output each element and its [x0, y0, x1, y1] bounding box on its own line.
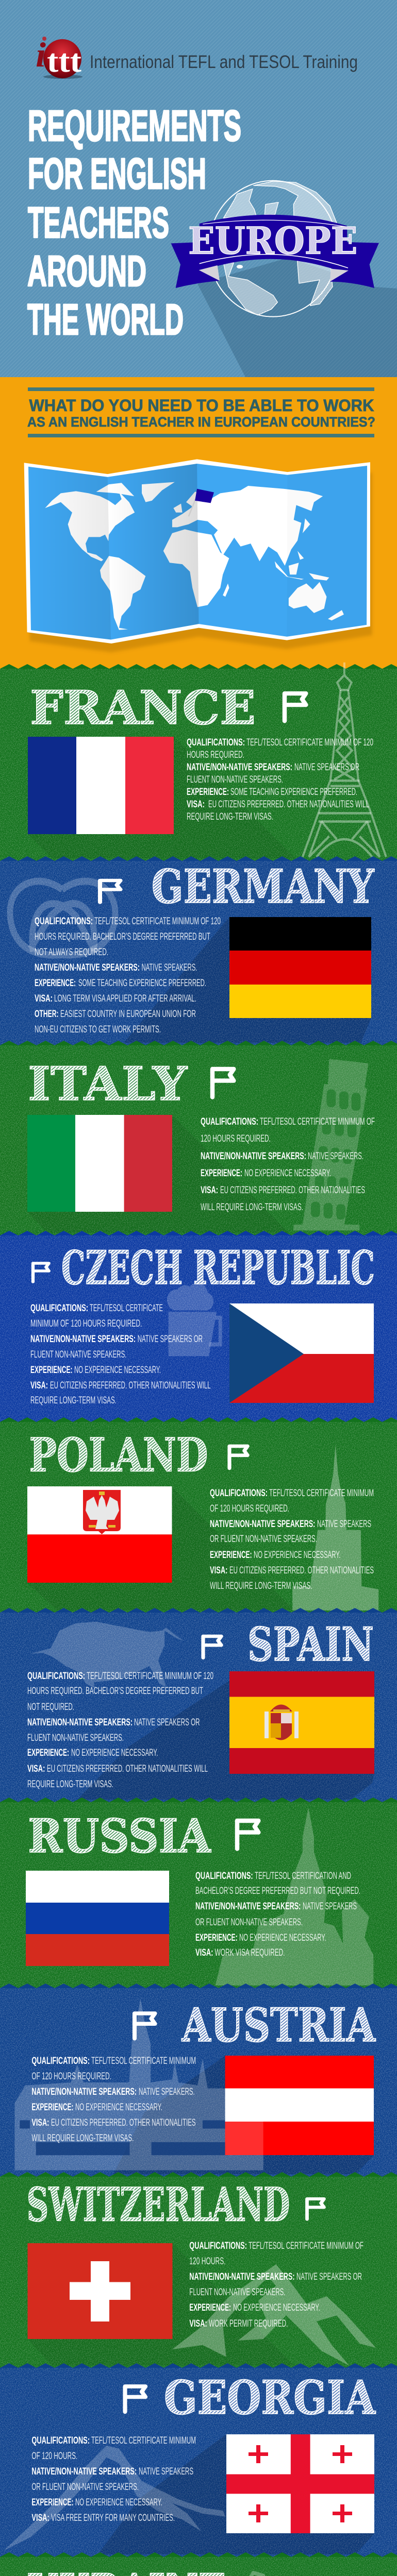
- flag shadow: [28, 737, 295, 858]
- text: Czech Republic requirements: REQUIRE LONG-TERM VISAS.: [30, 1395, 117, 1406]
- panel: France: [0, 663, 397, 865]
- flag shadow: [124, 917, 371, 1043]
- flag shadow: [113, 2056, 374, 2174]
- text: Czech Republic requirements: [30, 1302, 211, 1406]
- emblem: Polish eagle: [83, 1490, 121, 1534]
- text: Austria requirements: NATIVE SPEAKERS.: [139, 2086, 195, 2097]
- text: Russia requirements: VISA:: [195, 1947, 213, 1958]
- icon: flag marker: [203, 1636, 221, 1658]
- text: Switzerland requirements: FLUENT NON-NATIVE SPEAKERS.: [189, 2286, 286, 2298]
- text: Czech Republic requirements: FLUENT NON-NATIVE SPEAKERS.: [30, 1349, 127, 1360]
- text: Austria requirements: TEFL/TESOL CERTIFICATE MINIMUM: [91, 2055, 196, 2066]
- ribbon text: EUROPE: [188, 219, 357, 262]
- text: Georgia requirements: NO EXPERIENCE NECESSARY.: [75, 2497, 162, 2508]
- text: Czech Republic requirements: MINIMUM OF 120 HOURS REQUIRED.: [30, 1318, 142, 1329]
- flag: Russia: [26, 1871, 169, 1966]
- logo: ittt: ttt: [47, 44, 81, 79]
- text: France requirements: FLUENT NON-NATIVE SPEAKERS.: [187, 774, 283, 785]
- text: Poland requirements: WILL REQUIRE LONG-TERM VISAS.: [210, 1580, 312, 1591]
- text: Switzerland requirements: NO EXPERIENCE NECESSARY.: [233, 2302, 320, 2313]
- flag: Austria: [225, 2056, 374, 2155]
- text: Czech Republic requirements: EU CITIZENS PREFERRED. OTHER NATIONALITIES WILL: [50, 1380, 211, 1391]
- heading rule bottom: [28, 434, 374, 437]
- text: Italy requirements: NATIVE/NON-NATIVE SPEAKERS:: [201, 1150, 306, 1162]
- flag shadow: [98, 2434, 374, 2554]
- text: Poland requirements: QUALIFICATIONS:: [210, 1487, 268, 1499]
- icon: flag marker: [212, 1069, 234, 1097]
- text: Georgia requirements: NATIVE/NON-NATIVE SPEAKERS:: [31, 2466, 137, 2477]
- text: Germany requirements: NATIVE SPEAKERS.: [141, 962, 197, 973]
- icon: pin flag: [189, 489, 214, 516]
- panel: header: [0, 0, 397, 377]
- logo wordmark: International TEFL and TESOL Training: [90, 52, 358, 72]
- panel: Czech Republic: [0, 1231, 397, 1422]
- text: Switzerland requirements: [189, 2240, 363, 2329]
- text: Spain requirements: EXPERIENCE:: [27, 1747, 69, 1758]
- heading: Poland: POLAND: [29, 1428, 208, 1483]
- text: France requirements: VISA:: [187, 799, 205, 810]
- panel: Germany: [0, 856, 397, 1049]
- text: Russia requirements: NATIVE SPEAKERS: [303, 1901, 357, 1912]
- text: Austria requirements: NO EXPERIENCE NECESSARY.: [75, 2102, 162, 2113]
- text: France requirements: [187, 737, 373, 822]
- text: Germany requirements: VISA:: [35, 993, 53, 1004]
- text: France requirements: NATIVE/NON-NATIVE SPEAKERS:: [187, 761, 292, 773]
- text: Switzerland requirements: 120 HOURS.: [189, 2256, 226, 2267]
- text: Georgia requirements: OF 120 HOURS.: [31, 2450, 77, 2462]
- text: Georgia requirements: [31, 2435, 196, 2523]
- text: Spain requirements: EU CITIZENS PREFERRED. OTHER NATIONALITIES WILL: [47, 1763, 208, 1774]
- panel: Austria: [0, 1984, 397, 2179]
- text: Germany requirements: [35, 916, 221, 1035]
- text: Spain requirements: VISA:: [27, 1763, 45, 1774]
- flag: Germany: [229, 917, 371, 1018]
- panel: Spain: [0, 1608, 397, 1803]
- text: Russia requirements: NO EXPERIENCE NECESSARY.: [239, 1932, 326, 1943]
- text: Russia requirements: EXPERIENCE:: [195, 1932, 238, 1943]
- text: Spain requirements: [27, 1670, 213, 1790]
- text: Spain requirements: NO EXPERIENCE NECESSARY.: [71, 1747, 158, 1758]
- question heading: WHAT DO YOU NEED TO BE ABLE TO WORK: [29, 396, 374, 415]
- text: Germany requirements: TEFL/TESOL CERTIFICATE MINIMUM OF 120: [94, 916, 221, 927]
- logo: ittt: [36, 35, 82, 79]
- icon: mountains: [172, 2264, 376, 2366]
- question heading: AS AN ENGLISH TEACHER IN EUROPEAN COUNTRIES?: [27, 414, 375, 430]
- text: Georgia requirements: QUALIFICATIONS:: [31, 2435, 90, 2446]
- text: Czech Republic requirements: VISA:: [30, 1380, 48, 1391]
- main title: THE WORLD: [27, 295, 184, 344]
- icon: flag marker: [100, 880, 121, 902]
- text: Italy requirements: VISA:: [201, 1184, 218, 1196]
- heading: Italy: ITALY: [28, 1057, 188, 1111]
- text: France requirements: HOURS REQUIRED.: [187, 749, 244, 760]
- icon: palace of culture: [292, 1444, 378, 1611]
- text: Italy requirements: EXPERIENCE:: [201, 1167, 242, 1179]
- icon: flag marker: [237, 1821, 258, 1849]
- text: Germany requirements: EASIEST COUNTRY IN EUROPEAN UNION FOR: [60, 1008, 196, 1020]
- panel: Poland: [0, 1417, 397, 1613]
- text: Italy requirements: WILL REQUIRE LONG-TERM VISAS.: [201, 1201, 303, 1213]
- text: Switzerland requirements: QUALIFICATIONS:: [189, 2240, 247, 2251]
- panel: Georgia: [0, 2363, 397, 2558]
- text: Poland requirements: OR FLUENT NON-NATIVE SPEAKERS.: [210, 1533, 317, 1545]
- text: Austria requirements: NATIVE/NON-NATIVE SPEAKERS:: [31, 2086, 137, 2097]
- flag: Czech Republic: [229, 1303, 374, 1403]
- text: Spain requirements: QUALIFICATIONS:: [27, 1670, 85, 1682]
- text: Germany requirements: HOURS REQUIRED. BACHELOR’S DEGREE PREFERRED BUT: [35, 931, 210, 942]
- text: Italy requirements: NO EXPERIENCE NECESSARY.: [244, 1167, 331, 1179]
- text: Russia requirements: [195, 1870, 360, 1958]
- icon: leaning tower of Pisa: [293, 1059, 369, 1230]
- icon: Eiffel tower: [303, 663, 386, 857]
- icon: flag marker: [285, 693, 306, 721]
- main title: TEACHERS: [28, 198, 169, 247]
- text: Georgia requirements: EXPERIENCE:: [31, 2497, 73, 2508]
- flag: Georgia: [226, 2434, 374, 2533]
- text: Spain requirements: NOT REQUIRED.: [27, 1701, 74, 1713]
- text: Czech Republic requirements: EXPERIENCE:: [30, 1364, 72, 1376]
- flag: Italy: [27, 1115, 172, 1212]
- text: Germany requirements: OTHER:: [35, 1008, 59, 1020]
- icon: flag marker: [33, 1263, 49, 1282]
- text: Germany requirements: NON-EU CITIZENS TO GET WORK PERMITS.: [35, 1024, 161, 1035]
- text: Spain requirements: NATIVE/NON-NATIVE SPEAKERS:: [27, 1717, 133, 1728]
- main title: FOR ENGLISH: [28, 149, 206, 198]
- text: France requirements: QUALIFICATIONS:: [187, 737, 245, 748]
- main title: REQUIREMENTS: [28, 101, 241, 150]
- text: Poland requirements: [210, 1487, 374, 1591]
- text: Russia requirements: WORK VISA REQUIRED.: [214, 1947, 285, 1958]
- text: Georgia requirements: VISA:: [31, 2512, 49, 2523]
- panel: question and world map: [0, 377, 397, 669]
- world map: [24, 459, 372, 652]
- icon: beer mug: [167, 1282, 220, 1356]
- text: Russia requirements: OR FLUENT NON-NATIVE SPEAKERS.: [195, 1917, 303, 1928]
- heading: Russia: RUSSIA: [28, 1809, 211, 1863]
- icon: Vienna parliament: [14, 1998, 263, 2170]
- heading: France: FRANCE: [30, 681, 256, 735]
- icon: Carpathian mountains: [139, 2573, 387, 2576]
- icon: flag marker: [135, 2013, 155, 2039]
- building overlap on flag: [225, 2093, 263, 2155]
- text: Poland requirements: VISA:: [210, 1565, 228, 1576]
- icon: mountains: [4, 2446, 225, 2551]
- text: Italy requirements: QUALIFICATIONS:: [201, 1116, 258, 1127]
- text: Czech Republic requirements: TEFL/TESOL CERTIFICATE: [90, 1302, 163, 1314]
- flag shadow: [27, 1486, 294, 1610]
- text: Spain requirements: REQUIRE LONG-TERM VISAS.: [27, 1778, 113, 1790]
- icon: pretzel: [10, 882, 115, 955]
- text: Switzerland requirements: NATIVE/NON-NATIVE SPEAKERS:: [189, 2271, 295, 2282]
- question heading: [27, 396, 375, 430]
- text: Czech Republic requirements: NATIVE/NON-NATIVE SPEAKERS:: [30, 1333, 136, 1345]
- text: Austria requirements: VISA:: [31, 2117, 49, 2128]
- panel: Ukraine: [0, 2552, 397, 2576]
- text: Italy requirements: [201, 1116, 375, 1213]
- text: Switzerland requirements: VISA:: [189, 2318, 207, 2329]
- panel: Russia: [0, 1798, 397, 1993]
- flag shadow: [28, 2243, 294, 2365]
- flag shadow: [27, 1115, 289, 1233]
- text: Austria requirements: [31, 2055, 196, 2144]
- text: Germany requirements: SOME TEACHING EXPERIENCE PREFERRED.: [78, 977, 206, 989]
- emblem: Spanish coat of arms: [264, 1704, 299, 1740]
- panel: Switzerland: [0, 2172, 397, 2370]
- icon: globe with Europe ribbon: [171, 181, 379, 317]
- text: Spain requirements: TEFL/TESOL CERTIFICATE MINIMUM OF 120: [87, 1670, 213, 1682]
- heading rule top: [28, 387, 374, 391]
- text: Germany requirements: NATIVE/NON-NATIVE SPEAKERS:: [35, 962, 140, 973]
- text: Germany requirements: QUALIFICATIONS:: [35, 916, 93, 927]
- text: Georgia requirements: TEFL/TESOL CERTIFICATE MINIMUM: [91, 2435, 196, 2446]
- icon: flag marker: [125, 2386, 145, 2412]
- text: Spain requirements: FLUENT NON-NATIVE SPEAKERS.: [27, 1732, 124, 1743]
- text: Austria requirements: OF 120 HOURS REQUIRED.: [31, 2071, 111, 2082]
- text: Italy requirements: 120 HOURS REQUIRED.: [201, 1133, 271, 1144]
- text: Switzerland requirements: WORK PERMIT REQUIRED.: [209, 2318, 288, 2329]
- ribbon: [171, 215, 379, 288]
- text: Spain requirements: HOURS REQUIRED. BACHELOR’S DEGREE PREFERRED BUT: [27, 1685, 203, 1697]
- icon: bull: [30, 1622, 185, 1688]
- text: Germany requirements: EXPERIENCE:: [35, 977, 76, 989]
- panel: Italy: [0, 1041, 397, 1235]
- text: Spain requirements: NATIVE SPEAKERS OR: [134, 1717, 200, 1728]
- flag: Switzerland: [28, 2243, 172, 2339]
- text: Poland requirements: EXPERIENCE:: [210, 1549, 252, 1561]
- text: Austria requirements: QUALIFICATIONS:: [31, 2055, 90, 2066]
- logo: ittt: i: [36, 35, 46, 74]
- main title: AROUND: [27, 247, 146, 295]
- text: Russia requirements: NATIVE/NON-NATIVE SPEAKERS:: [195, 1901, 301, 1912]
- text: Switzerland requirements: EXPERIENCE:: [189, 2302, 231, 2313]
- text: Austria requirements: EU CITIZENS PREFERRED. OTHER NATIONALITIES: [51, 2117, 196, 2128]
- text: France requirements: EXPERIENCE:: [187, 786, 229, 798]
- text: Russia requirements: QUALIFICATIONS:: [195, 1870, 253, 1882]
- text: France requirements: REQUIRE LONG-TERM VISAS.: [187, 811, 273, 822]
- text: Georgia requirements: VISA FREE ENTRY FOR MANY COUNTRIES.: [51, 2512, 175, 2523]
- text: Czech Republic requirements: NATIVE SPEAKERS OR: [138, 1333, 203, 1345]
- icon: flag marker: [307, 2199, 324, 2219]
- text: Poland requirements: NATIVE/NON-NATIVE SPEAKERS:: [210, 1518, 315, 1530]
- flag: France: [28, 737, 174, 834]
- text: Austria requirements: EXPERIENCE:: [31, 2102, 73, 2113]
- icon: flag marker: [229, 1446, 247, 1468]
- text: Germany requirements: LONG TERM VISA APPLIED FOR AFTER ARRIVAL.: [54, 993, 196, 1004]
- text: Georgia requirements: OR FLUENT NON-NATIVE SPEAKERS.: [31, 2481, 139, 2493]
- flag: Spain: [229, 1671, 374, 1774]
- text: Georgia requirements: NATIVE SPEAKERS: [139, 2466, 193, 2477]
- text: Austria requirements: WILL REQUIRE LONG-TERM VISAS.: [31, 2132, 134, 2144]
- globe long shadow: [197, 258, 397, 377]
- flag shadow: [77, 1681, 374, 1800]
- flag: Poland: [27, 1486, 172, 1583]
- text: Poland requirements: OF 120 HOURS REQUIRED.: [210, 1503, 289, 1514]
- icon: Saint Basil's cathedral: [215, 1807, 373, 1986]
- text: Germany requirements: NOT ALWAYS REQUIRED.: [35, 946, 108, 958]
- text: Czech Republic requirements: NO EXPERIENCE NECESSARY.: [74, 1364, 161, 1376]
- text: Czech Republic requirements: QUALIFICATIONS:: [30, 1302, 88, 1314]
- main title: [27, 101, 241, 344]
